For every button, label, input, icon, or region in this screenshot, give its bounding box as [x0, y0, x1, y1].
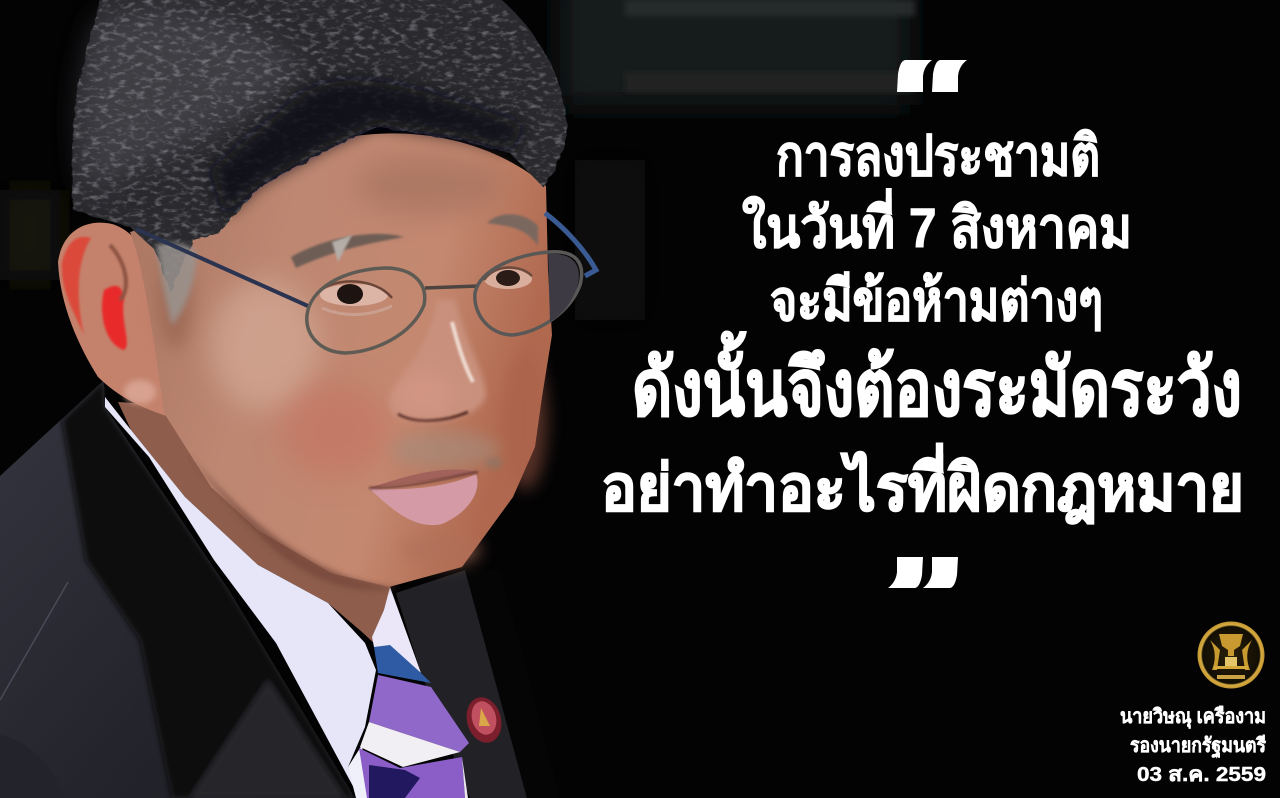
closing quotation mark	[888, 557, 958, 588]
ear	[58, 223, 172, 418]
date: 03 ส.ค. 2559	[1137, 764, 1266, 786]
right lens	[475, 252, 582, 335]
right temple arm	[545, 213, 596, 276]
speaker position: รองนายกรัฐมนตรี	[1130, 734, 1266, 759]
mouth	[369, 469, 478, 525]
hair	[72, 0, 567, 325]
striped tie	[359, 645, 469, 798]
quote line 1: การลงประชามติ	[776, 124, 1100, 187]
quote text	[601, 124, 1244, 524]
eyeglasses	[136, 213, 596, 353]
bridge	[425, 286, 478, 288]
hair grey strands	[72, 0, 567, 292]
lens reflection	[548, 254, 579, 322]
lapel pin	[462, 693, 506, 747]
icon: government seal	[1198, 622, 1264, 688]
quote line 2: ในวันที่ 7 สิงหาคม	[742, 188, 1132, 259]
hair highlights	[81, 11, 300, 190]
eyebrows	[291, 214, 538, 268]
nose	[389, 300, 486, 421]
speaker name: นายวิษณุ เครืองาม	[1120, 705, 1266, 729]
quote line 5: อย่าทำอะไรที่ผิดกฎหมาย	[601, 443, 1244, 524]
sideburn	[156, 243, 197, 325]
speaker credit	[1120, 705, 1266, 786]
left lens	[307, 268, 425, 353]
hair mass	[72, 0, 567, 292]
eyes	[318, 267, 532, 315]
neck	[118, 402, 392, 645]
hair fringe shading	[210, 80, 525, 215]
shirt collar	[105, 397, 421, 798]
suit jacket	[0, 380, 560, 798]
moustache shadow	[390, 432, 502, 469]
face shading and highlights	[157, 155, 547, 590]
portrait photo of speaker	[0, 0, 596, 798]
quote line 3: จะมีข้อห้ามต่างๆ	[770, 269, 1103, 332]
face	[130, 133, 552, 587]
opening quotation mark	[897, 60, 967, 92]
left temple arm	[136, 229, 308, 306]
